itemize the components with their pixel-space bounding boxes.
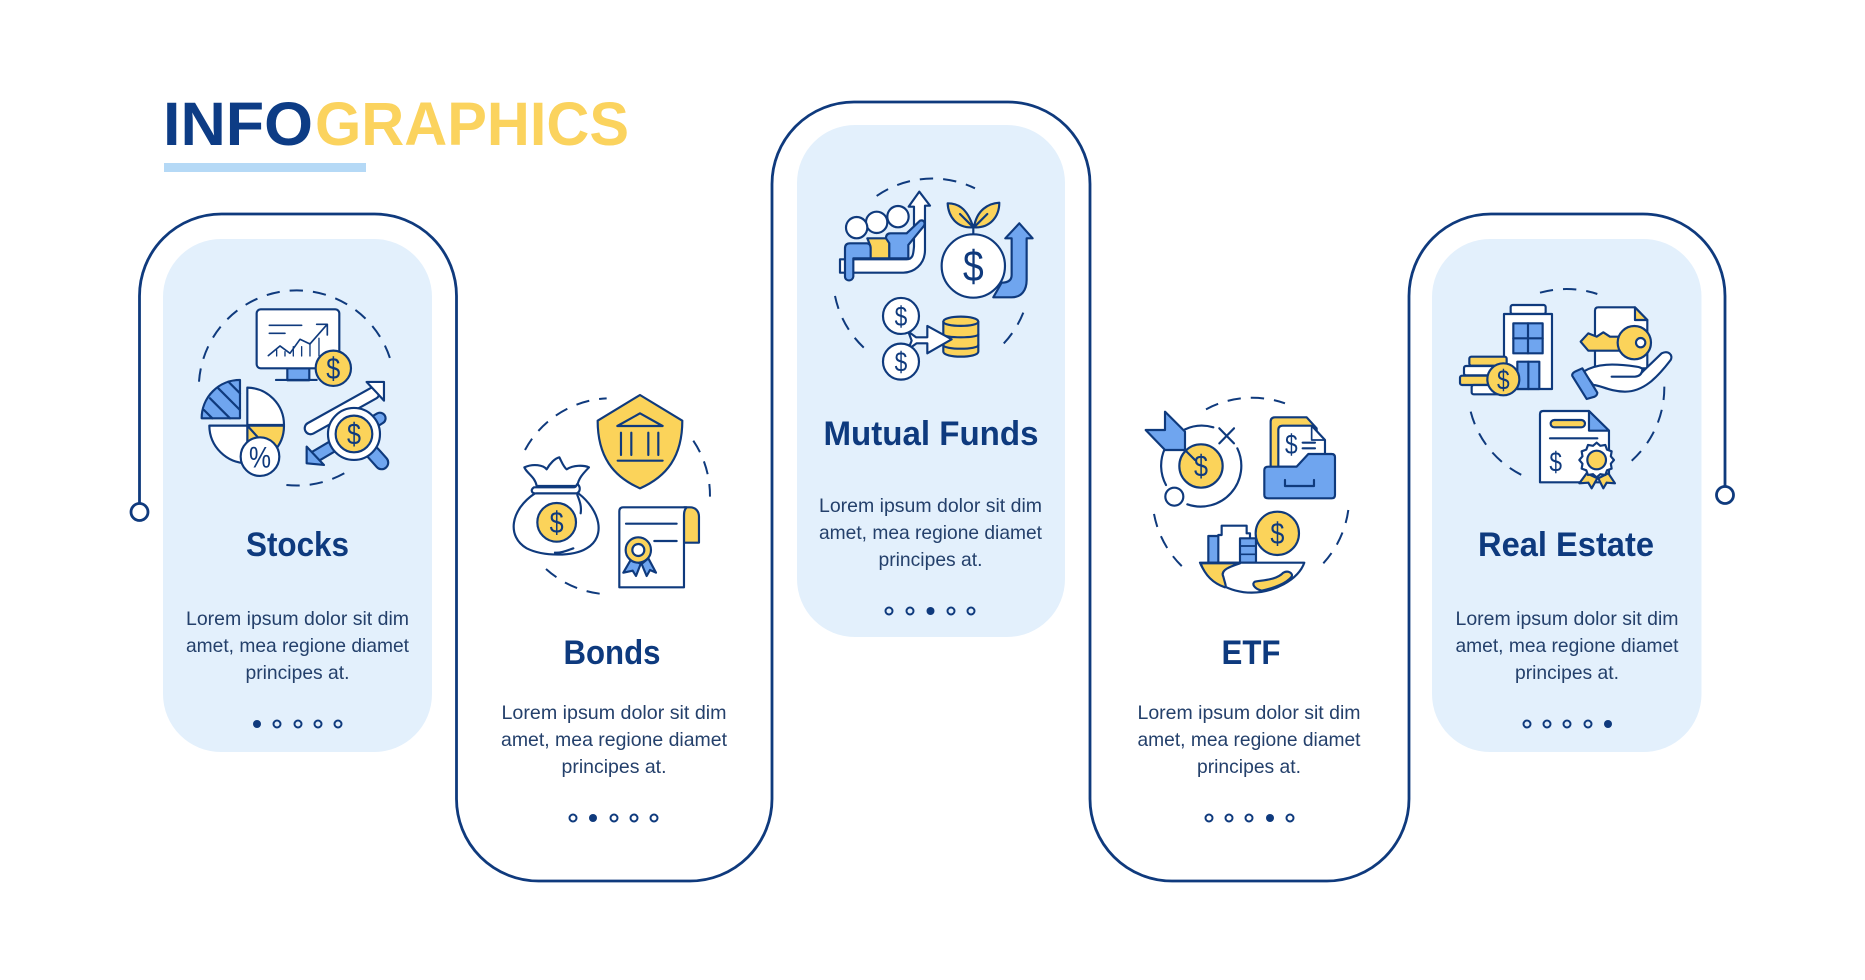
pagination dots: etf: [1206, 814, 1294, 822]
real estate background: [1432, 239, 1702, 752]
body text: stocks: principes at.: [246, 662, 350, 684]
body text: stocks: [186, 608, 410, 684]
right end node: [1716, 486, 1734, 504]
body text: stocks: Lorem ipsum dolor sit dim: [186, 608, 409, 630]
body text: etf: Lorem ipsum dolor sit dim: [1138, 702, 1360, 724]
icon: real estate: $: [1549, 447, 1562, 478]
icon: mutual funds: $: [895, 347, 908, 378]
icon: etf: $: [1285, 429, 1298, 460]
icon: mutual funds: $: [963, 243, 984, 291]
body text: stocks: amet, mea regione diamet: [186, 635, 410, 657]
pagination dots: mutual funds: [886, 607, 974, 615]
body text: bonds: Lorem ipsum dolor sit dim: [502, 702, 726, 724]
icon: etf: $: [1194, 450, 1208, 484]
heading: bonds: Bonds: [564, 634, 660, 672]
body text: bonds: [501, 702, 728, 778]
icon: etf: $: [1270, 517, 1284, 551]
body text: etf: principes at.: [1197, 756, 1301, 778]
body text: real estate: Lorem ipsum dolor sit dim: [1456, 608, 1678, 630]
icon: stocks: [199, 290, 392, 486]
icon: bonds: $: [550, 506, 564, 540]
connecting outline around the five panels: [140, 102, 1725, 881]
body text: real estate: amet, mea regione diamet: [1456, 635, 1679, 657]
icon: stocks: $: [326, 352, 340, 386]
stocks background: [163, 239, 432, 752]
icon: stocks: %: [249, 441, 271, 474]
pagination dots: stocks: [253, 720, 342, 728]
title underline: [164, 163, 366, 172]
heading: mutual funds: Mutual Funds: [824, 415, 1038, 453]
body text: mutual funds: principes at.: [878, 549, 982, 571]
pagination dots: real estate: [1524, 720, 1612, 728]
body text: mutual funds: amet, mea regione diamet: [819, 522, 1043, 544]
icon: real estate: [1460, 289, 1671, 488]
heading: stocks: Stocks: [246, 526, 349, 564]
title: GRAPHICS: [315, 90, 629, 158]
body text: real estate: principes at.: [1515, 662, 1619, 684]
body text: etf: [1138, 702, 1361, 778]
icon: real estate: $: [1497, 364, 1510, 395]
mutual funds background: [797, 125, 1065, 637]
title: INFO: [163, 90, 313, 158]
left end node: [131, 504, 148, 520]
icon: bonds: [514, 395, 710, 594]
title: [163, 90, 629, 158]
body text: mutual funds: Lorem ipsum dolor sit dim: [819, 495, 1042, 517]
panel: real estate: [1432, 239, 1702, 752]
icon: etf: [1146, 398, 1348, 593]
body text: etf: amet, mea regione diamet: [1138, 729, 1361, 751]
pagination dots: bonds: [570, 814, 658, 822]
body text: mutual funds: [819, 495, 1043, 571]
heading: etf: ETF: [1222, 634, 1280, 672]
panel: etf: [1138, 398, 1361, 822]
panel: bonds: [501, 395, 728, 822]
icon: mutual funds: [835, 179, 1033, 380]
panel: mutual funds: [797, 125, 1065, 637]
body text: real estate: [1456, 608, 1679, 684]
body text: bonds: principes at.: [562, 756, 666, 778]
body text: bonds: amet, mea regione diamet: [501, 729, 728, 751]
icon: stocks: $: [347, 418, 361, 452]
heading: real estate: Real Estate: [1478, 526, 1654, 564]
icon: mutual funds: $: [895, 301, 908, 332]
panel: stocks: [163, 239, 432, 752]
